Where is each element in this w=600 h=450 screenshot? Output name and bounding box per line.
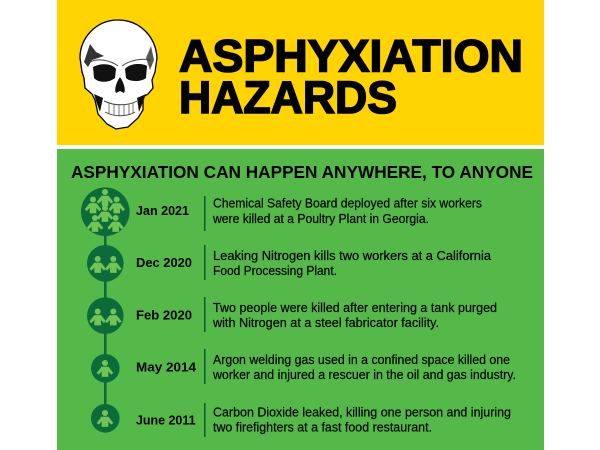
- heading: ASPHYXIATION CAN HAPPEN ANYWHERE, TO ANYONE: [71, 162, 533, 182]
- title: ASPHYXIATION: [179, 30, 523, 82]
- entry: Feb 2020: Two people were killed after entering a tank purged: [213, 301, 497, 315]
- panel: incidents: [57, 149, 544, 450]
- header panel: [57, 0, 544, 145]
- entry: Jan 2021: Chemical Safety Board deployed after six workers: [213, 197, 482, 211]
- entry: June 2011: [136, 403, 511, 437]
- icon: skull: [80, 20, 157, 129]
- icon: one person: [91, 404, 120, 433]
- entry: Jan 2021: [136, 196, 482, 231]
- title: [179, 30, 523, 123]
- entry: Jan 2021: were killed at a Poultry Plant in Georgia.: [212, 212, 429, 226]
- icon: six people: [81, 187, 130, 236]
- entry: June 2011: two firefighters at a fast food restaurant.: [213, 421, 432, 435]
- icon: two people: [87, 245, 124, 282]
- entry: June 2011: Carbon Dioxide leaked, killing one person and injuring: [213, 406, 511, 420]
- icon: one person: [91, 354, 120, 383]
- entry: Dec 2020: [136, 245, 491, 280]
- entry: May 2014: worker and injured a rescuer in the oil and gas industry.: [212, 368, 516, 382]
- title: HAZARDS: [179, 72, 397, 123]
- entry: Feb 2020: [136, 297, 497, 332]
- entry: June 2011: June 2011: [136, 413, 196, 427]
- entry: May 2014: May 2014: [136, 361, 196, 375]
- timeline connector: [104, 230, 107, 410]
- entry: Dec 2020: Food Processing Plant.: [213, 264, 337, 278]
- icon: two people: [87, 297, 124, 334]
- entry: May 2014: Argon welding gas used in a confined space killed one: [213, 353, 510, 367]
- entry: Jan 2021: Jan 2021: [136, 204, 189, 218]
- entry: Dec 2020: Leaking Nitrogen kills two workers at a California: [213, 249, 491, 263]
- entry: Feb 2020: with Nitrogen at a steel fabricator facility.: [212, 316, 439, 330]
- entry: Feb 2020: Feb 2020: [136, 308, 192, 322]
- entry: May 2014: [136, 349, 516, 384]
- entry: Dec 2020: Dec 2020: [136, 256, 192, 270]
